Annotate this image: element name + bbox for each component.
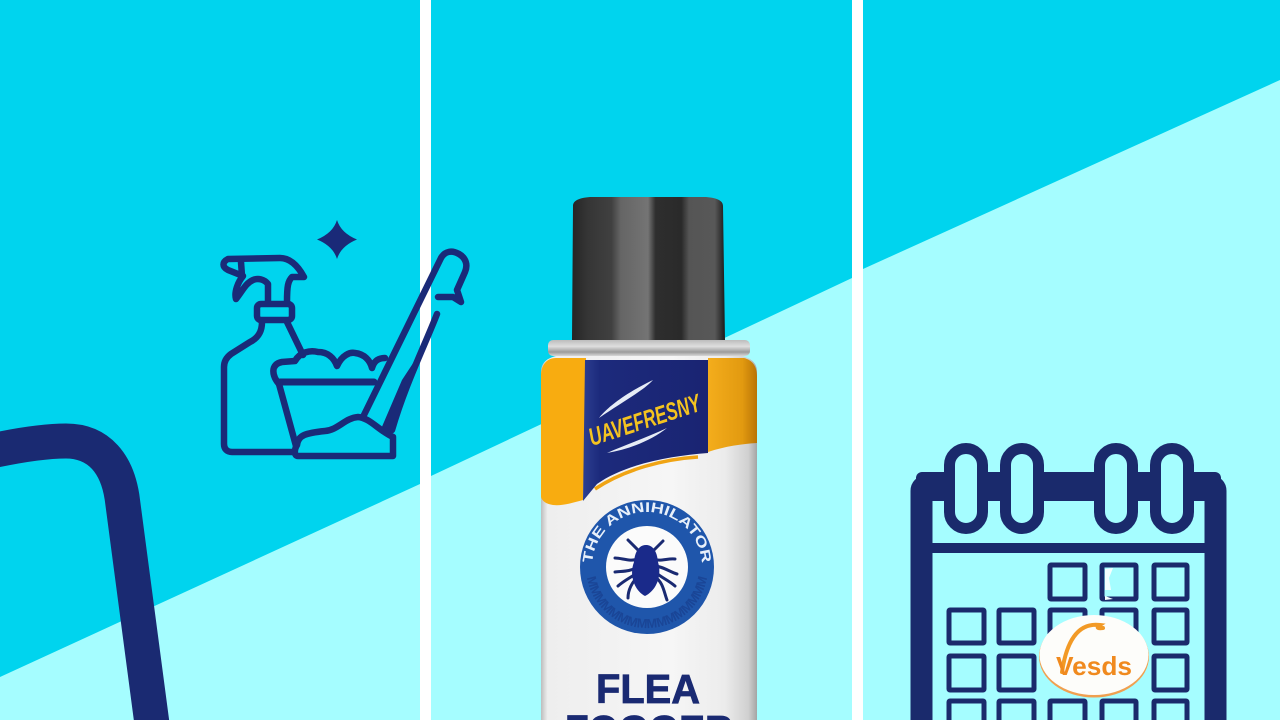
icon: cleaning supplies: [224, 220, 466, 456]
calendar day grid: [949, 565, 1187, 720]
left orange shoulder: [541, 358, 586, 505]
seal top text: THE ANNIHILATOR: [582, 502, 711, 563]
icon: calendar: [916, 448, 1221, 720]
icon: large curved navy hook: [0, 441, 152, 720]
panel: right calendar background: [863, 0, 1280, 720]
panel: left cleaning background: [0, 0, 420, 720]
calendar frame: [922, 486, 1216, 720]
panel: middle product background: [431, 0, 852, 720]
sticker swoosh: [1062, 625, 1103, 672]
can rim: [548, 340, 750, 356]
brand name: UAVEFRESNY: [585, 389, 706, 452]
orange sticker badge: [1039, 615, 1149, 698]
icon: spray bottle: [224, 258, 304, 452]
icon: sparkle: [317, 220, 357, 259]
icon: flea: [615, 540, 677, 600]
calendar header bar: [916, 472, 1221, 553]
can cap: [572, 197, 725, 340]
right orange shoulder: [708, 358, 757, 452]
can body: [541, 356, 757, 720]
white speck on calendar cell: [1105, 568, 1113, 600]
sticker text: Vesds: [1056, 651, 1132, 681]
navy brand label: [583, 360, 708, 501]
icon: foam bucket: [273, 351, 385, 446]
seal bottom text: MMMMMMMMMMMMMMMM: [587, 576, 707, 628]
brand swooshes: [599, 380, 667, 453]
flea seal: [580, 500, 714, 634]
orange wave stripe: [595, 457, 698, 489]
calendar rings: [950, 448, 1188, 528]
icon: mop with handle: [295, 252, 466, 456]
product: flea fogger aerosol can: [541, 197, 757, 720]
product name: FLEA: [596, 666, 700, 712]
